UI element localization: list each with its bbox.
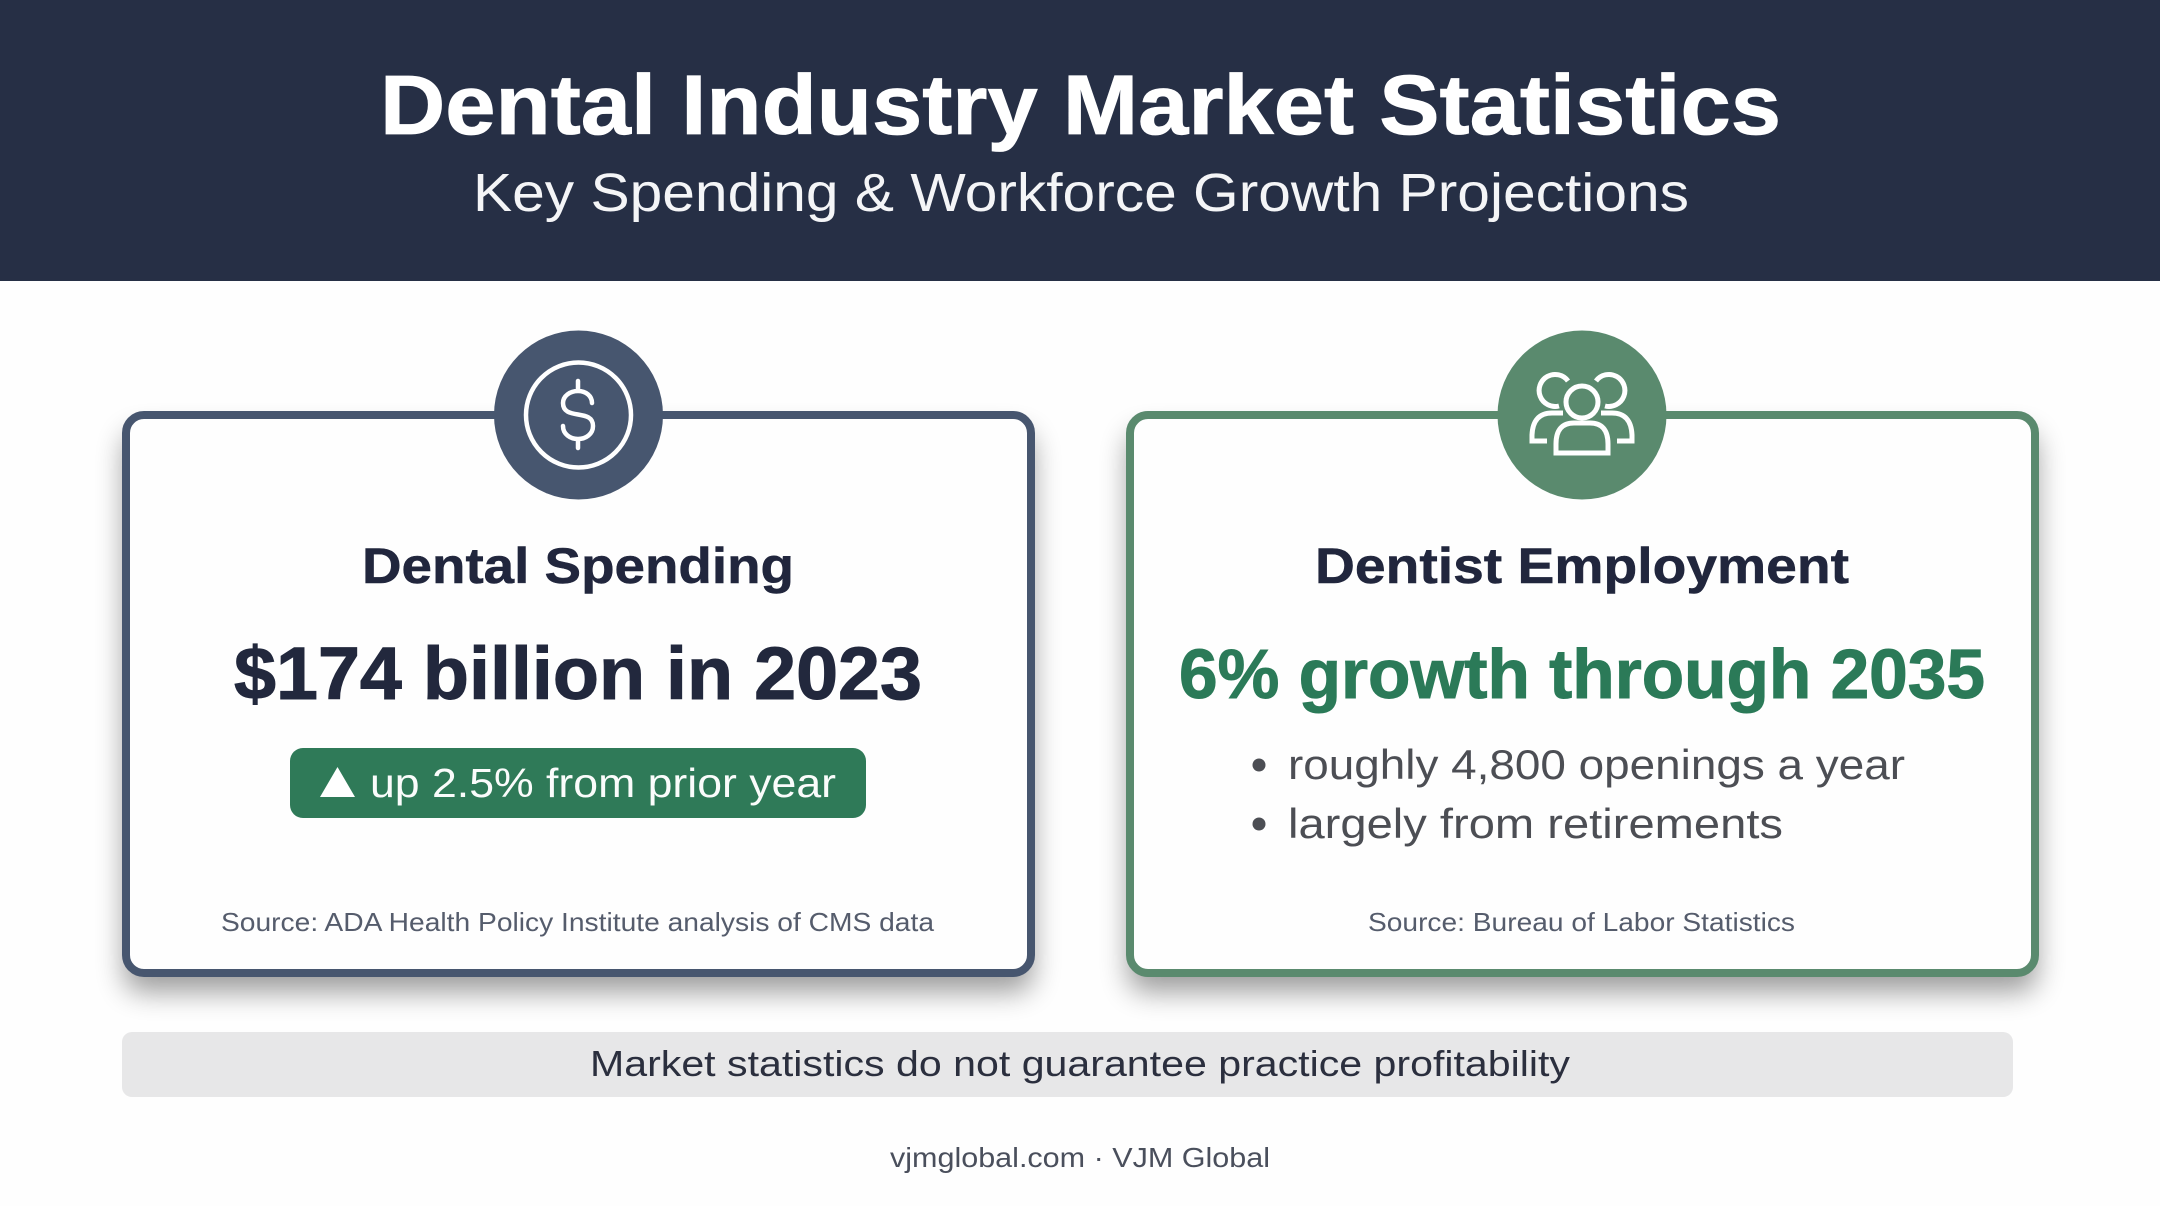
bullet list: largely from retirements <box>1288 800 1783 847</box>
source: bls: Source: Bureau of Labor Statistics <box>1368 907 1795 937</box>
icon: dollar coin <box>494 330 663 500</box>
footer: vjmglobal.com · VJM Global <box>890 1142 1270 1173</box>
icon: up triangle <box>320 767 355 797</box>
source: ada: Source: ADA Health Policy Institute analysis of CMS data <box>221 907 935 937</box>
bullet list: roughly 4,800 openings a year <box>1288 741 1905 788</box>
badge: up 2.5 percent <box>290 748 866 818</box>
disclaimer bar: Market statistics do not guarantee practice profitability <box>590 1043 1570 1084</box>
badge: up 2.5 percent: up 2.5% from prior year <box>370 760 836 806</box>
header banner <box>0 0 2160 281</box>
title: Dental Industry Market Statistics <box>380 58 1781 152</box>
subtitle: Key Spending & Workforce Growth Projections <box>473 163 1689 223</box>
heading: dentist employment: Dentist Employment <box>1315 538 1849 594</box>
panel: dental spending <box>124 330 1033 992</box>
disclaimer bar <box>122 1032 2013 1097</box>
bullet list <box>1252 741 1905 847</box>
heading: dental spending: Dental Spending <box>362 538 794 594</box>
stat: 6 percent growth: 6% growth through 2035 <box>1179 635 1985 713</box>
icon: people group <box>1498 330 1666 500</box>
panel: dentist employment <box>1128 330 2037 992</box>
stat: 174 billion: $174 billion in 2023 <box>234 632 922 715</box>
